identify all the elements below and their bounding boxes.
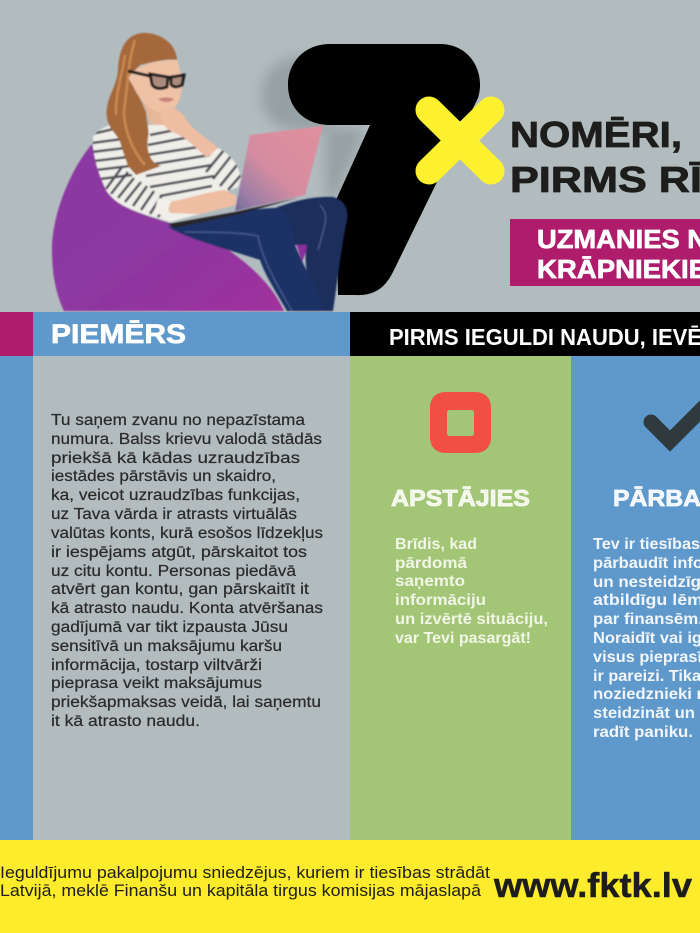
panel: check: par finansēm. [593, 611, 700, 628]
footer [0, 840, 700, 933]
headline [510, 114, 700, 200]
panel: example text: it kā atrasto naudu. [51, 713, 200, 730]
hand on chin [160, 108, 218, 158]
panel: stop: pārdomā [395, 555, 467, 572]
icon: stop ring [430, 392, 491, 453]
panel: example text: Tu saņem zvanu no nepazīstama [51, 412, 305, 429]
sleeve cuff [154, 198, 172, 216]
lips [158, 98, 174, 102]
panel: check: radīt paniku. [593, 724, 693, 741]
panel: example text: uz Tava vārda ir atrasts virtuālās [51, 506, 297, 523]
panel: check: Noraidīt vai ig [593, 630, 700, 647]
headline: NOMĒRI, [510, 114, 682, 155]
footer note: Latvijā, meklē Finanšu un kapitāla tirgus komisijas mājaslapā [0, 882, 482, 900]
header: black banner [350, 312, 700, 356]
header strip: magenta block [0, 312, 33, 356]
laptop base [168, 197, 300, 228]
hands on keyboard [166, 190, 236, 214]
big number 7 [288, 44, 480, 295]
panel: example text: ka, veicot uzraudzības funkcijas, [51, 487, 300, 504]
headline: PIRMS RĪ [510, 159, 700, 200]
heading: apstājies: APSTĀJIES [391, 485, 530, 511]
panel: check: Tev ir tiesības [593, 536, 700, 553]
panel: check: noziedznieki r [593, 686, 700, 703]
beanbag [52, 144, 284, 311]
panel: example text: priekšapmaksas veidā, lai saņemtu [51, 694, 321, 711]
laptop screen [235, 126, 323, 211]
panel: check: visus pieprasī [593, 649, 700, 666]
panel: check: un nesteidzīg [593, 574, 700, 591]
panel: stop: informāciju [395, 592, 486, 609]
panel: check: atbildīgu lēm [593, 592, 700, 609]
shadow of number 7 [261, 56, 366, 198]
footer note: Ieguldījumu pakalpojumu sniedzējus, kuriem ir tiesības strādāt [0, 864, 490, 882]
panel: check: ir pareizi. Tika [593, 668, 700, 685]
panel: example text: iestādes pārstāvis un skaidro, [51, 468, 276, 485]
panel: check: steidzināt un [593, 705, 695, 722]
beanbag between legs [295, 240, 310, 262]
panel: stop: saņemto [395, 573, 465, 590]
icon: check mark [651, 401, 700, 441]
panel: check: pārbaudīt info [593, 555, 700, 572]
header: piemers: PIEMĒRS [51, 319, 186, 349]
panel: example text: uz citu kontu. Personas piedāvā [51, 563, 296, 580]
panel: example text: sensitīvā un maksājumu karšu [51, 638, 282, 655]
website: www.fktk.lv [493, 867, 692, 905]
panel: example text: gadījumā var tikt izpausta Jūsu [51, 619, 288, 636]
hair [107, 33, 177, 175]
hair highlights [116, 40, 145, 165]
back leg [270, 197, 347, 311]
callout: magenta banner [510, 219, 700, 286]
face [129, 60, 183, 113]
panel: example text: atvērt gan kontu, gan pārskaitīt it [51, 581, 310, 598]
panel: example text: kā atrasto naudu. Konta atvēršanas [51, 600, 323, 617]
front leg [168, 208, 325, 311]
header: piemers [33, 312, 350, 356]
left blue strip [0, 356, 33, 840]
callout: magenta banner: KRĀPNIEKIE [537, 254, 700, 284]
panel: example text: numura. Balss krievu valodā stādās [51, 431, 322, 448]
panel: example text: pieprasa veikt maksājumus [51, 675, 262, 692]
panel: stop [350, 356, 571, 840]
glasses [128, 71, 184, 88]
illustration: woman on beanbag with laptop [52, 33, 347, 311]
panel: check [571, 356, 700, 840]
panel: example text: priekšā kā kādas uzraudzības [51, 450, 300, 467]
panel: example text: informācija, tostarp viltvārži [51, 657, 262, 674]
footer note [0, 864, 490, 900]
callout: magenta banner: UZMANIES N [537, 224, 700, 254]
panel: example text: ir iespējams atgūt, pārskaitot tos [51, 544, 307, 561]
panel: example text: valūtas konts, kurā esošos līdzekļus [51, 525, 323, 542]
panel: stop: var Tevi pasargāt! [395, 630, 531, 647]
heading: pārbaudi: PĀRBA [613, 485, 700, 511]
sweater [92, 124, 242, 224]
panel: stop: Brīdis, kad [395, 536, 477, 553]
jeans seams [185, 205, 326, 311]
yellow multiplication sign [429, 110, 491, 171]
neck [140, 90, 172, 126]
panel: example text [33, 356, 350, 840]
panel: stop: un izvērtē situāciju, [395, 611, 548, 628]
